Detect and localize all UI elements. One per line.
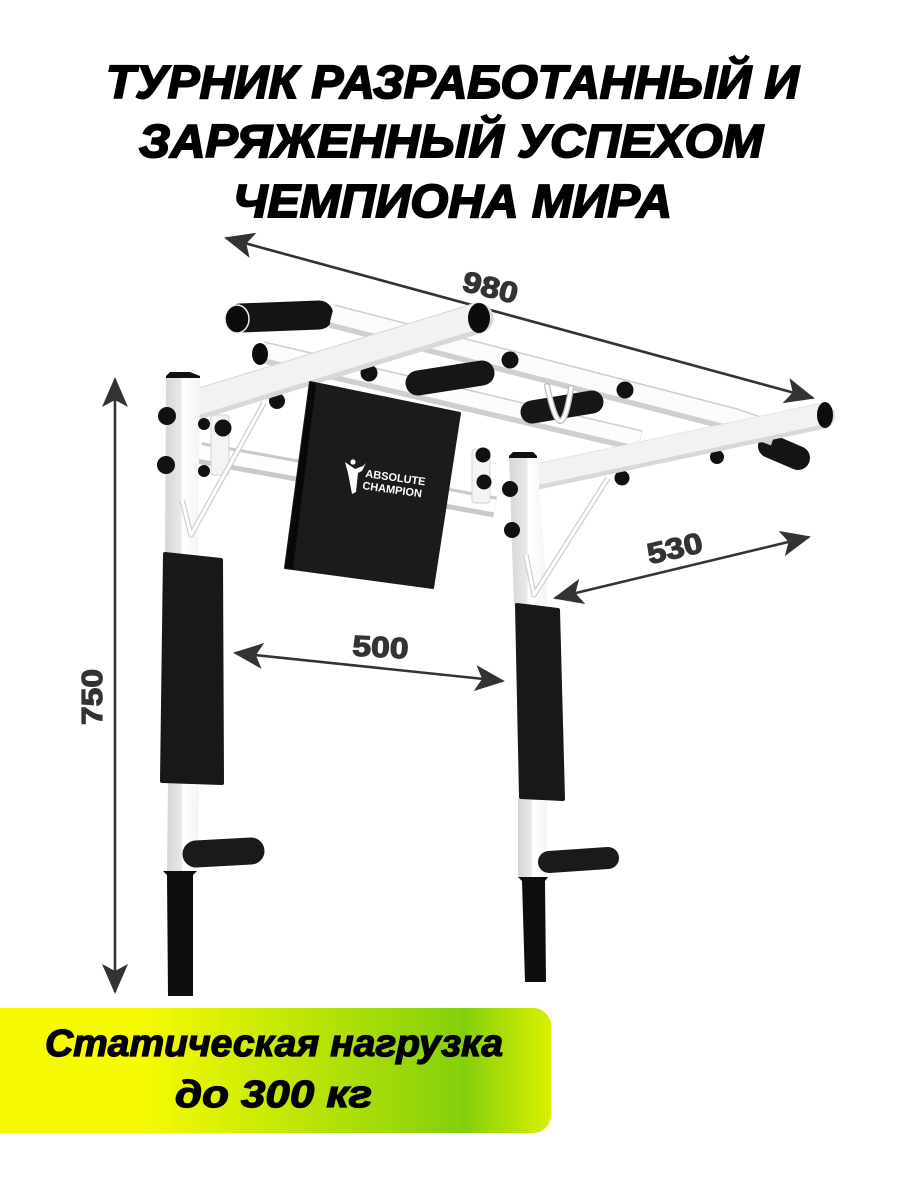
- right foot grip: [549, 858, 608, 862]
- hanging grips: [418, 373, 592, 421]
- wall posts: [165, 372, 548, 877]
- banner text: Статическая нагрузка: [45, 1023, 503, 1065]
- logo text: CHAMPION: [362, 480, 423, 500]
- dimension arrow: 530: 530: [644, 527, 706, 571]
- short middle tube: [252, 343, 640, 441]
- load banner: [0, 1008, 551, 1133]
- left foot grip: [196, 851, 251, 854]
- left wall sleeve: [163, 871, 197, 996]
- bolts on rear tubes: [269, 352, 724, 486]
- dimension arrow: 500: 500: [352, 631, 409, 665]
- right wall sleeve: [518, 877, 548, 982]
- rear grip right: [770, 446, 798, 458]
- back lower cross tube: [200, 452, 495, 507]
- dimension arrow: 750: 750: [77, 669, 109, 725]
- logo text: ABSOLUTE: [365, 468, 426, 488]
- title: ЗАРЯЖЕННЫЙ УСПЕХОМ: [139, 115, 765, 167]
- dimension arrow: 980: [226, 238, 813, 398]
- back pad with logo: [285, 382, 460, 588]
- title: ЧЕМПИОНА МИРА: [233, 175, 672, 227]
- title: ТУРНИК РАЗРАБОТАННЫЙ И: [106, 56, 800, 108]
- bolts on posts: [157, 407, 520, 538]
- side tube right: [535, 402, 833, 477]
- long rear tube: [332, 314, 775, 434]
- title: [106, 56, 800, 227]
- banner text: [45, 1023, 503, 1116]
- logo icon: [345, 462, 366, 494]
- left pad: [162, 554, 222, 783]
- dimension arrow: 530: [555, 527, 809, 598]
- braces: [182, 403, 608, 595]
- logo text: [362, 468, 426, 500]
- side tube left: [198, 303, 490, 404]
- banner text: до 300 кг: [175, 1074, 372, 1116]
- right pad: [517, 605, 563, 799]
- dimension arrow: 500: [235, 631, 503, 681]
- dimension arrow: 980: 980: [459, 266, 521, 311]
- pull-up bar frame: [157, 303, 833, 996]
- mounting plates: [211, 415, 490, 503]
- rear grip left: [225, 305, 319, 333]
